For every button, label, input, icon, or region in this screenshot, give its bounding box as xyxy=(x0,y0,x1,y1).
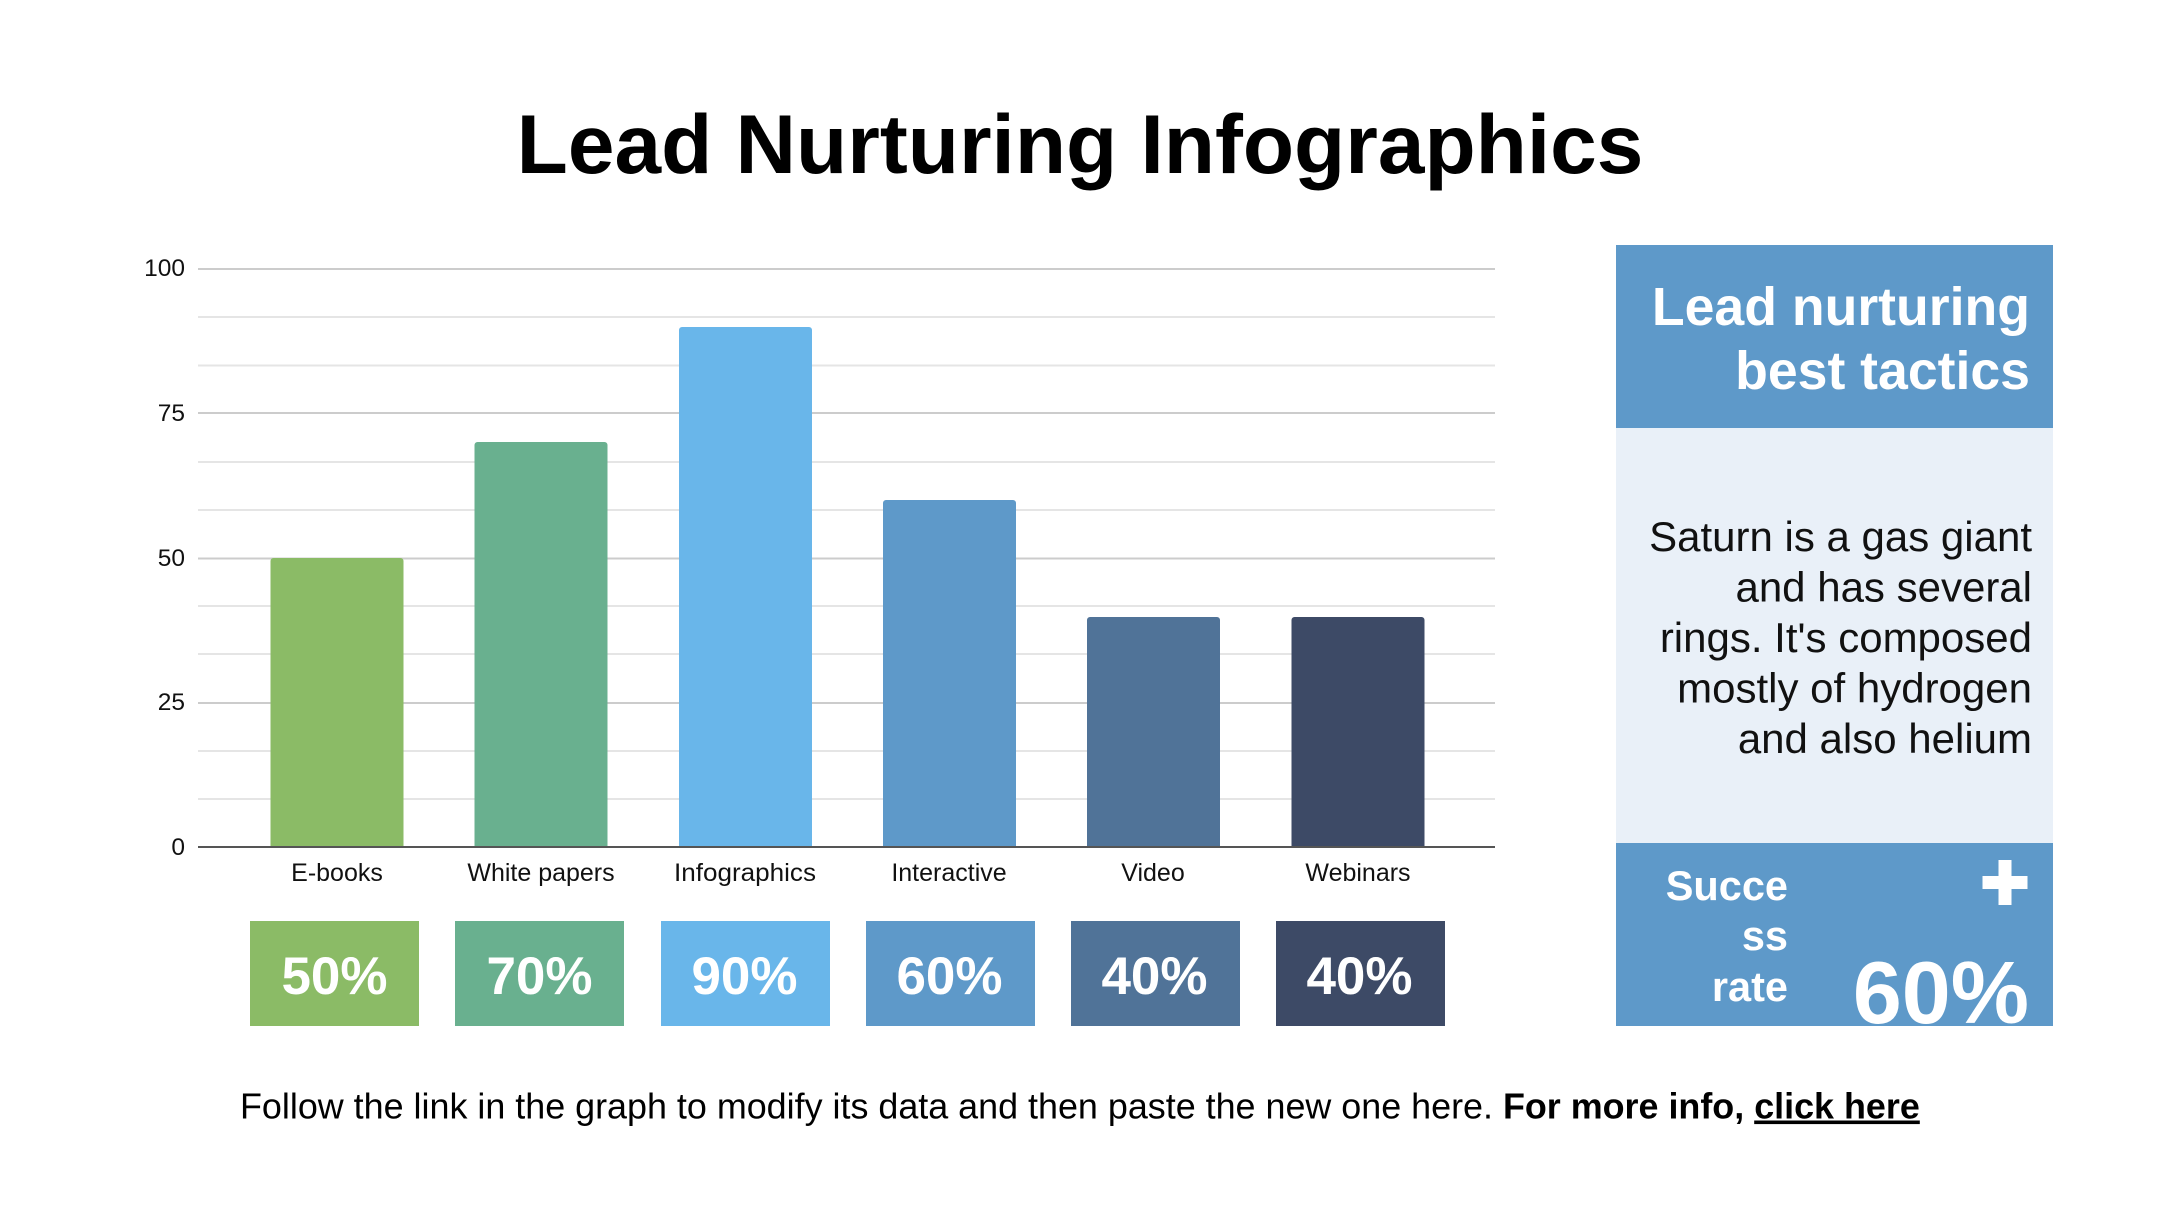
panel: success rate xyxy=(1616,843,2053,1042)
y axis labels: 75 xyxy=(158,400,185,427)
category labels: White papers xyxy=(467,859,615,887)
panel: best tactics header: best tactics xyxy=(1735,341,2030,401)
success rate label: rate xyxy=(1712,963,1788,1010)
panel: description xyxy=(1616,428,2053,843)
success rate label: Succe xyxy=(1666,862,1788,909)
percentage tiles: 50% xyxy=(281,947,388,1006)
y axis labels: 0 xyxy=(171,834,185,861)
percentage tiles: 60% xyxy=(896,947,1003,1006)
percentage tiles: 90% xyxy=(691,947,798,1006)
category labels xyxy=(291,859,1411,887)
y axis labels xyxy=(144,255,185,861)
category labels: E-books xyxy=(291,859,383,887)
percentage tiles: 40% xyxy=(1306,947,1413,1006)
category labels: Infographics xyxy=(674,859,816,887)
success rate label xyxy=(1666,862,1788,1010)
percentage tiles: 70% xyxy=(486,947,593,1006)
percentage tiles: 40% xyxy=(1101,947,1208,1006)
category labels: Interactive xyxy=(891,859,1007,887)
panel: description: Saturn is a gas giant xyxy=(1649,513,2032,560)
panel: description: mostly of hydrogen xyxy=(1677,664,2032,712)
panel: best tactics header xyxy=(1616,245,2053,428)
footnote: Follow the link in the graph to modify its data and then paste the new one here. For more info, click here xyxy=(240,1086,1920,1126)
panel: description: and also helium xyxy=(1738,715,2032,762)
panel: description: rings. It's composed xyxy=(1660,614,2032,661)
title: Lead Nurturing Infographics xyxy=(517,97,1643,191)
category labels: Video xyxy=(1121,859,1185,887)
category labels: Webinars xyxy=(1305,859,1411,887)
icon: plus xyxy=(1982,860,2028,905)
y axis labels: 25 xyxy=(158,689,185,716)
panel: best tactics header: Lead nurturing xyxy=(1652,277,2030,337)
panel: description: and has several xyxy=(1735,564,2032,610)
percentage tiles xyxy=(250,921,1445,1026)
success rate value: 60% xyxy=(1853,943,2029,1042)
bars xyxy=(270,327,1424,847)
success rate label: ss xyxy=(1742,912,1788,959)
y axis labels: 50 xyxy=(158,545,185,572)
y axis labels: 100 xyxy=(144,255,185,282)
bar chart xyxy=(144,255,1495,887)
